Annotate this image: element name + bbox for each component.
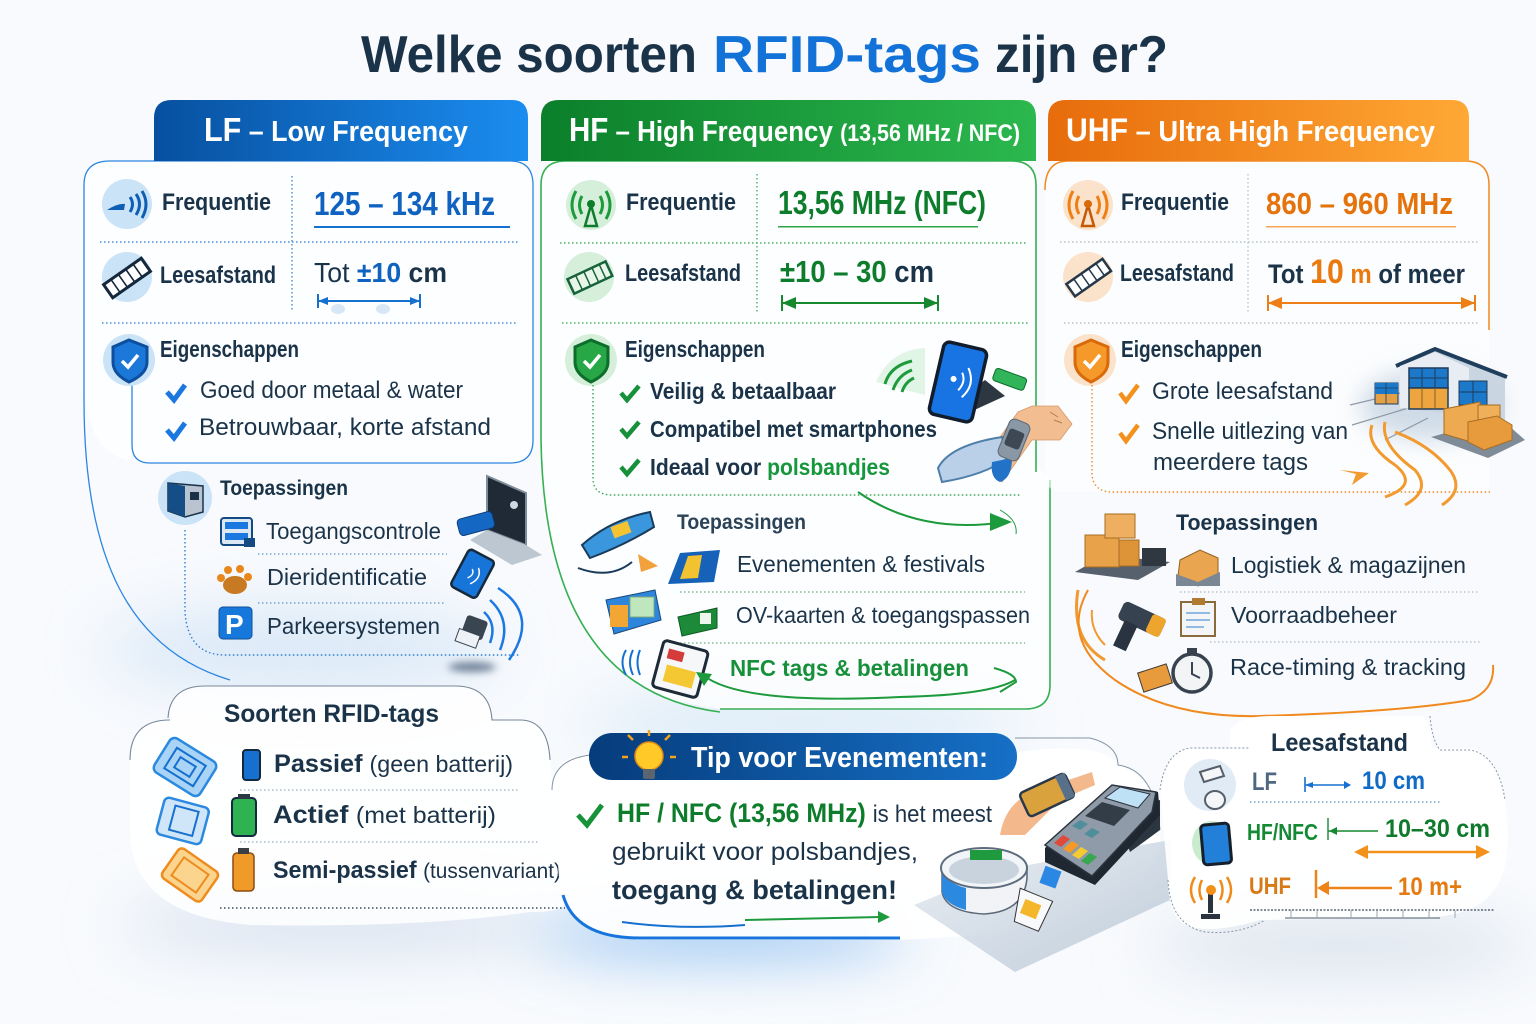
icon: boxes on pallet — [1075, 514, 1170, 580]
UHF header: UHF – Ultra High Frequency — [1066, 112, 1435, 148]
icon: tag — [564, 252, 614, 302]
tip header pill: Tip voor Evenementen: — [691, 742, 988, 774]
HF read range row — [564, 252, 938, 311]
UHF applications — [1075, 510, 1493, 716]
HF frequency row: 13,56 MHz (NFC) — [778, 184, 986, 221]
UHF applications: Race-timing & tracking — [1230, 654, 1466, 680]
row: LF — [1184, 759, 1425, 811]
LF applications: Toegangscontrole — [266, 518, 441, 544]
icon: stopwatch — [1138, 648, 1211, 692]
icon: antenna — [1063, 180, 1113, 230]
HF properties: Veilig & betaalbaar — [650, 378, 836, 404]
panel: UHF — [1045, 100, 1525, 716]
row: UHF: UHF — [1249, 873, 1291, 900]
icon: smartphone with wifi — [876, 341, 1027, 423]
icon: parking — [219, 607, 252, 640]
LF applications — [158, 471, 542, 672]
row: Actief: Actief (met batterij) — [273, 801, 496, 829]
row: Semi-passief — [160, 846, 561, 904]
icon: card box — [606, 590, 661, 634]
UHF applications: Voorraadbeheer — [1231, 602, 1397, 628]
panel: Tip voor Evenementen — [552, 730, 1170, 972]
LF applications: Toepassingen — [220, 477, 348, 500]
LF read range row: Tot ±10 cm — [314, 257, 447, 288]
row: LF: LF — [1252, 768, 1277, 796]
row: Passief — [152, 736, 513, 798]
HF applications: Toepassingen — [677, 511, 806, 534]
HF properties: Ideaal voor polsbandjes — [650, 454, 890, 480]
icon: shield — [575, 340, 608, 382]
HF properties: Eigenschappen — [625, 336, 765, 362]
UHF header — [1048, 100, 1469, 161]
UHF read range row — [1063, 252, 1475, 311]
row: HF/NFC: 10–30 cm — [1385, 815, 1490, 843]
icon: access — [221, 518, 255, 547]
ruler — [1250, 910, 1495, 918]
LF frequency row — [102, 179, 510, 229]
HF read range row: ±10 – 30 cm — [780, 254, 934, 289]
HF frequency row: Frequentie — [626, 189, 736, 216]
UHF applications: Toepassingen — [1176, 510, 1318, 535]
tip text: gebruikt voor polsbandjes, — [612, 838, 918, 866]
icon: orange tag stream — [1340, 422, 1456, 505]
row: Passief: Passief (geen batterij) — [274, 750, 513, 778]
icon: warehouse — [1350, 349, 1525, 458]
UHF frequency row: Frequentie — [1121, 189, 1229, 216]
LF header: LF – Low Frequency — [204, 111, 468, 148]
title: Welke soorten — [361, 26, 697, 84]
LF properties — [103, 334, 491, 441]
icon: scanner with waves — [448, 588, 522, 672]
row: UHF — [1191, 870, 1462, 919]
UHF read range row: Tot 10 m of meer — [1268, 253, 1465, 291]
icon: ticket — [668, 550, 720, 584]
HF applications: NFC tags & betalingen — [730, 655, 969, 681]
icon: phone — [450, 548, 495, 599]
panel: Leesafstand comparison — [1160, 716, 1508, 932]
icon: pass — [678, 608, 717, 636]
LF header — [154, 100, 528, 161]
row: HF/NFC: HF/NFC — [1247, 819, 1318, 845]
UHF read range row: Leesafstand — [1120, 260, 1234, 287]
LF applications: Dieridentificatie — [267, 564, 427, 590]
UHF frequency row — [1063, 180, 1456, 230]
LF properties: Eigenschappen — [160, 336, 299, 362]
HF applications — [578, 511, 1030, 699]
HF applications: OV-kaarten & toegangspassen — [736, 602, 1030, 628]
HF properties: Compatibel met smartphones — [650, 416, 937, 442]
icon: tag — [1063, 252, 1113, 302]
UHF frequency row: 860 – 960 MHz — [1266, 186, 1453, 221]
panel: Leesafstand comparison: Leesafstand — [1271, 729, 1408, 757]
UHF applications: Logistiek & magazijnen — [1231, 552, 1466, 578]
LF frequency row: 125 – 134 kHz — [314, 185, 495, 222]
HF properties — [565, 334, 1027, 534]
row: UHF: 10 m+ — [1398, 873, 1462, 901]
icon: NFC card with waves — [622, 640, 709, 698]
icon: shield — [113, 340, 147, 382]
UHF properties: meerdere tags — [1153, 449, 1308, 476]
LF properties: Betrouwbaar, korte afstand — [199, 414, 491, 441]
UHF properties — [1064, 334, 1525, 505]
panel: Soorten RFID-tags — [130, 686, 565, 925]
HF applications: Evenementen & festivals — [737, 551, 985, 577]
tip header pill — [589, 733, 1017, 780]
HF header — [541, 100, 1036, 161]
title: zijn er? — [995, 26, 1168, 84]
row: Semi-passief: Semi-passief (tussenvariant) — [273, 857, 561, 884]
tip text: toegang & betalingen! — [612, 875, 897, 905]
icon: tag — [102, 252, 152, 302]
icon: antenna — [566, 180, 616, 230]
LF read range row — [102, 252, 447, 314]
LF properties: Goed door metaal & water — [200, 377, 463, 404]
icon: paw — [217, 565, 252, 594]
icon: light bulb — [622, 730, 676, 779]
HF frequency row — [566, 180, 986, 230]
icon: small box — [1176, 550, 1220, 586]
icon: laptop — [456, 476, 542, 565]
icon: wrist with band — [938, 406, 1072, 482]
LF read range row: Leesafstand — [160, 262, 276, 289]
title: RFID-tags — [713, 26, 981, 84]
icon: reader box — [168, 483, 203, 517]
UHF properties: Snelle uitlezing van — [1152, 418, 1348, 445]
UHF properties: Eigenschappen — [1121, 336, 1262, 362]
HF header: HF – High Frequency (13,56 MHz / NFC) — [569, 111, 1020, 148]
panel: LF — [84, 100, 542, 680]
HF read range row: Leesafstand — [625, 260, 741, 287]
UHF properties: Grote leesafstand — [1152, 378, 1333, 405]
icon: parking: P — [225, 609, 244, 640]
icon: wristband — [578, 512, 658, 573]
panel: Soorten RFID-tags: Soorten RFID-tags — [224, 700, 439, 728]
LF frequency row: Frequentie — [162, 189, 271, 216]
tip text: HF / NFC (13,56 MHz) is het meest — [617, 798, 992, 828]
icon: scanner — [1077, 590, 1167, 661]
title — [361, 26, 1168, 84]
panel: HF — [541, 100, 1050, 712]
icon: clipboard — [1181, 598, 1215, 636]
row: LF: 10 cm — [1362, 767, 1425, 795]
icon: shield — [1075, 340, 1108, 382]
row: Actief — [156, 794, 496, 845]
LF applications: Parkeersystemen — [267, 613, 440, 639]
icon: signal — [102, 179, 152, 229]
row: HF/NFC — [1192, 815, 1490, 865]
illustration: payment terminal and wristband — [914, 772, 1170, 972]
tip text — [578, 798, 992, 927]
